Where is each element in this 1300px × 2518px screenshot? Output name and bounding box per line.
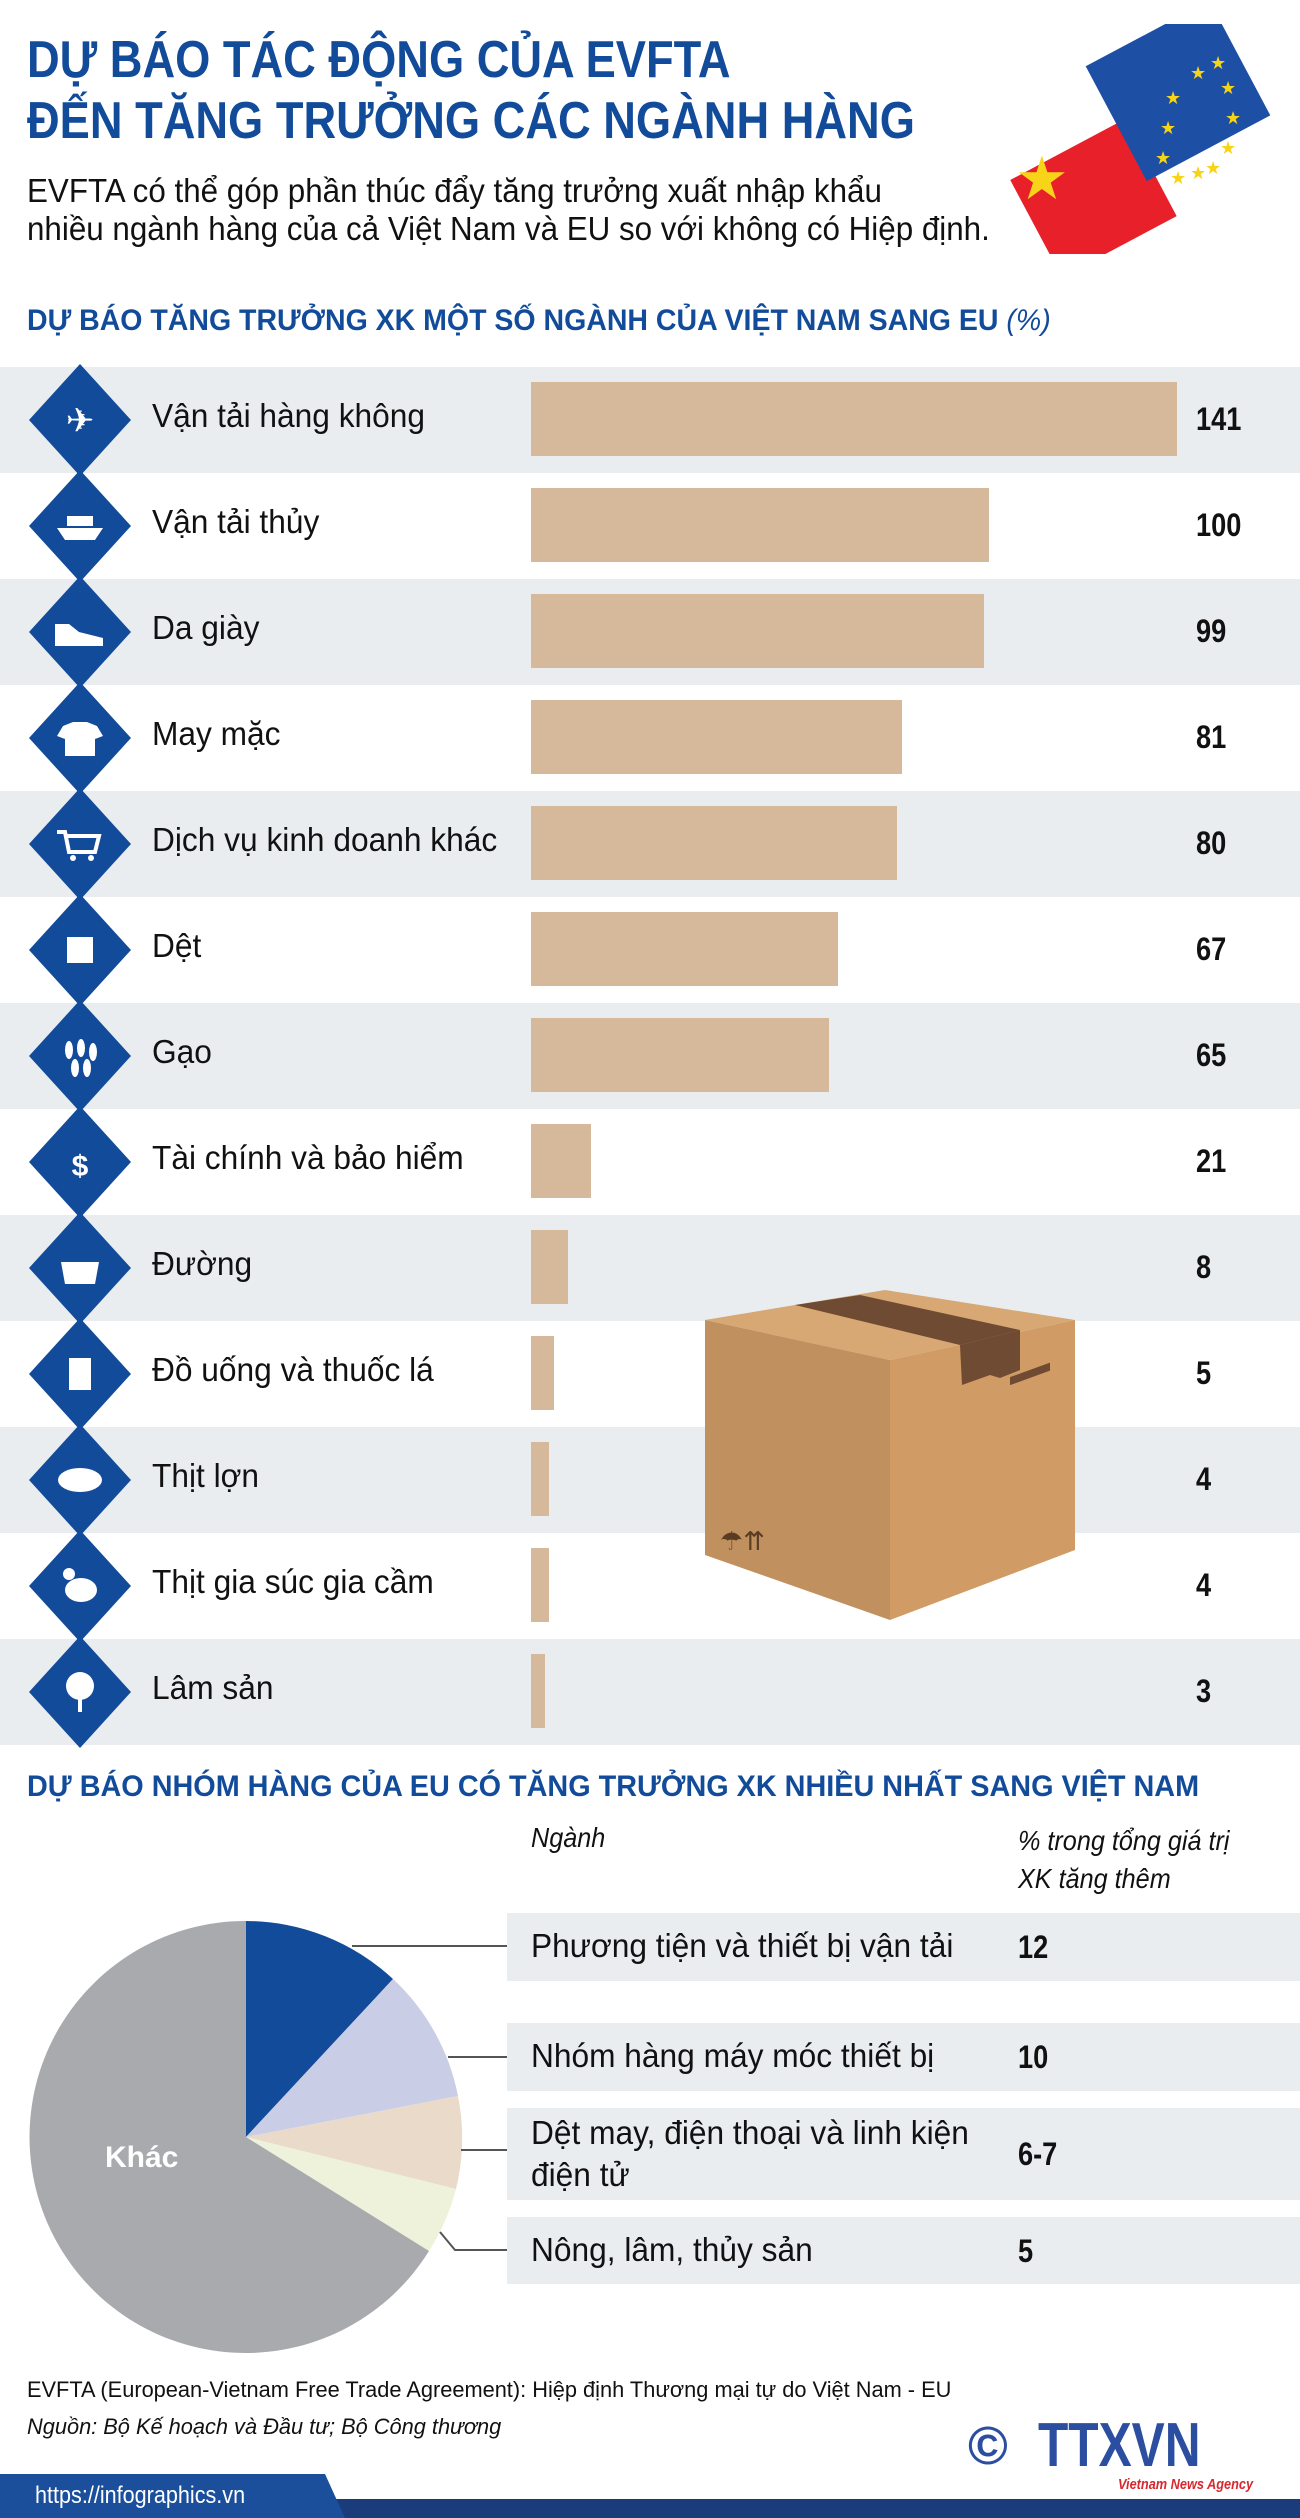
row: Gạo bbox=[0, 1003, 1300, 1109]
logo: TTXVN: TTXVN bbox=[1038, 2411, 1201, 2480]
row: Dịch vụ kinh doanh khác: Dịch vụ kinh doanh khác bbox=[152, 821, 497, 858]
source: Nguồn: Bộ Kế hoạch và Đầu tư; Bộ Công thương bbox=[27, 2414, 501, 2439]
table row 1: Phương tiện và thiết bị vận tải bbox=[531, 1927, 953, 1964]
illustration: cardboard box bbox=[705, 1290, 1075, 1620]
logo: TTXVN: © bbox=[968, 2416, 1008, 2476]
icon: flags: ★ bbox=[1220, 138, 1236, 159]
row: Lâm sản: Lâm sản bbox=[152, 1669, 274, 1706]
row: Đồ uống và thuốc lá: Đồ uống và thuốc lá bbox=[152, 1351, 434, 1388]
row: Gạo: Gạo bbox=[152, 1033, 212, 1070]
pie chart: Khác bbox=[105, 2141, 178, 2174]
icon: flags: ★ bbox=[1210, 53, 1226, 74]
table row 1: 12 bbox=[1018, 1929, 1048, 1965]
row: Thịt gia súc gia cầm: Thịt gia súc gia cầm bbox=[152, 1563, 434, 1600]
row: May mặc: May mặc bbox=[152, 715, 281, 752]
table row 4: Nông, lâm, thủy sản bbox=[531, 2231, 813, 2268]
footnote: EVFTA (European-Vietnam Free Trade Agreement): Hiệp định Thương mại tự do Việt Nam - EU bbox=[27, 2377, 951, 2402]
row: Vận tải thủy bbox=[29, 473, 1241, 579]
table row 1 bbox=[507, 1913, 1300, 1981]
row: Vận tải thủy: 100 bbox=[1196, 507, 1241, 543]
row: Thịt lợn: Thịt lợn bbox=[152, 1457, 259, 1494]
row: Gạo: 65 bbox=[1196, 1037, 1226, 1073]
row: Đường bbox=[0, 1215, 1300, 1321]
icon: flags bbox=[1010, 24, 1270, 254]
row: Da giày: 99 bbox=[1196, 613, 1226, 649]
row: Vận tải hàng không: Vận tải hàng không bbox=[152, 397, 425, 434]
title: DỰ BÁO TÁC ĐỘNG CỦA EVFTA bbox=[27, 31, 731, 89]
row: Tài chính và bảo hiểm: $ bbox=[72, 1150, 89, 1183]
table row 3: điện tử bbox=[531, 2156, 630, 2193]
row: Thịt gia súc gia cầm: 4 bbox=[1196, 1567, 1211, 1603]
title bbox=[27, 30, 915, 150]
icon: flags: ★ bbox=[1190, 163, 1206, 184]
row: Dịch vụ kinh doanh khác: 80 bbox=[1196, 825, 1226, 861]
title: ĐẾN TĂNG TRƯỞNG CÁC NGÀNH HÀNG bbox=[27, 92, 915, 150]
bar chart: VN exports bbox=[0, 364, 1300, 1748]
table row 4: 5 bbox=[1018, 2233, 1033, 2269]
row: Vận tải hàng không: ✈ bbox=[66, 401, 94, 441]
illustration: cardboard box: ☂⇈ bbox=[720, 1527, 765, 1557]
row: Lâm sản: 3 bbox=[1196, 1673, 1211, 1709]
row: Tài chính và bảo hiểm: Tài chính và bảo hiểm bbox=[152, 1139, 464, 1176]
subtitle bbox=[27, 172, 990, 247]
table: EU export groups bbox=[507, 1913, 1300, 2284]
row: Dệt bbox=[29, 897, 1226, 1003]
icon: flags: ★ bbox=[1205, 158, 1221, 179]
row: Da giày bbox=[0, 579, 1300, 685]
footer url: https://infographics.vn bbox=[35, 2482, 245, 2509]
text: XK tăng thêm bbox=[1018, 1863, 1171, 1894]
icon: flags: ★ bbox=[1155, 148, 1171, 169]
logo: TTXVN: Vietnam News Agency bbox=[1118, 2476, 1253, 2493]
icon: flags: ★ bbox=[1220, 78, 1236, 99]
icon: flags: ★ bbox=[1015, 144, 1069, 214]
row: May mặc bbox=[29, 685, 1226, 791]
table row 2 bbox=[507, 2023, 1300, 2091]
subtitle: nhiều ngành hàng của cả Việt Nam và EU so với không có Hiệp định. bbox=[27, 210, 990, 247]
logo: TTXVN bbox=[968, 2411, 1254, 2493]
table row 2: 10 bbox=[1018, 2039, 1048, 2075]
row: Đồ uống và thuốc lá: 5 bbox=[1196, 1355, 1211, 1391]
section heading: VN exports: DỰ BÁO TĂNG TRƯỞNG XK MỘT SỐ NGÀNH CỦA VIỆT NAM SANG EU (%) bbox=[27, 304, 1051, 337]
row: Dịch vụ kinh doanh khác bbox=[0, 791, 1300, 897]
table row 3 bbox=[507, 2108, 1300, 2200]
row: Vận tải hàng không: 141 bbox=[1196, 401, 1241, 437]
row: Lâm sản bbox=[0, 1639, 1300, 1745]
row: Vận tải hàng không bbox=[0, 367, 1300, 473]
row: Thịt lợn: 4 bbox=[1196, 1461, 1211, 1497]
table header: Ngành bbox=[531, 1822, 605, 1853]
icon: flags: ★ bbox=[1190, 63, 1206, 84]
row: Tài chính và bảo hiểm: 21 bbox=[1196, 1143, 1226, 1179]
table row 2: Nhóm hàng máy móc thiết bị bbox=[531, 2037, 934, 2074]
row: Đồ uống và thuốc lá bbox=[29, 1321, 1211, 1427]
row: Thịt lợn bbox=[0, 1427, 1300, 1533]
row: Đường: 8 bbox=[1196, 1249, 1211, 1285]
icon: flags: ★ bbox=[1165, 88, 1181, 109]
table row 3: Dệt may, điện thoại và linh kiện bbox=[531, 2114, 969, 2151]
row: Đường: Đường bbox=[152, 1245, 252, 1282]
icon: flags: ★ bbox=[1225, 108, 1241, 129]
table row 3: 6-7 bbox=[1018, 2136, 1057, 2172]
footer bar bbox=[0, 2474, 1300, 2518]
pie chart bbox=[30, 1921, 507, 2353]
row: Dệt: Dệt bbox=[152, 927, 201, 964]
row: Da giày: Da giày bbox=[152, 609, 259, 646]
icon: flags: ★ bbox=[1170, 168, 1186, 189]
row: May mặc: 81 bbox=[1196, 719, 1226, 755]
subtitle: EVFTA có thể góp phần thúc đẩy tăng trưởng xuất nhập khẩu bbox=[27, 172, 882, 209]
text: % trong tổng giá trị bbox=[1018, 1825, 1230, 1856]
row: Tài chính và bảo hiểm bbox=[29, 1109, 1226, 1215]
icon: flags: ★ bbox=[1160, 118, 1176, 139]
row: Vận tải thủy: Vận tải thủy bbox=[152, 503, 319, 540]
row: Dệt: 67 bbox=[1196, 931, 1226, 967]
table row 4 bbox=[507, 2217, 1300, 2284]
row: Thịt gia súc gia cầm bbox=[29, 1533, 1211, 1639]
section heading: EU exports: DỰ BÁO NHÓM HÀNG CỦA EU CÓ TĂNG TRƯỞNG XK NHIỀU NHẤT SANG VIỆT NAM bbox=[27, 1770, 1199, 1803]
